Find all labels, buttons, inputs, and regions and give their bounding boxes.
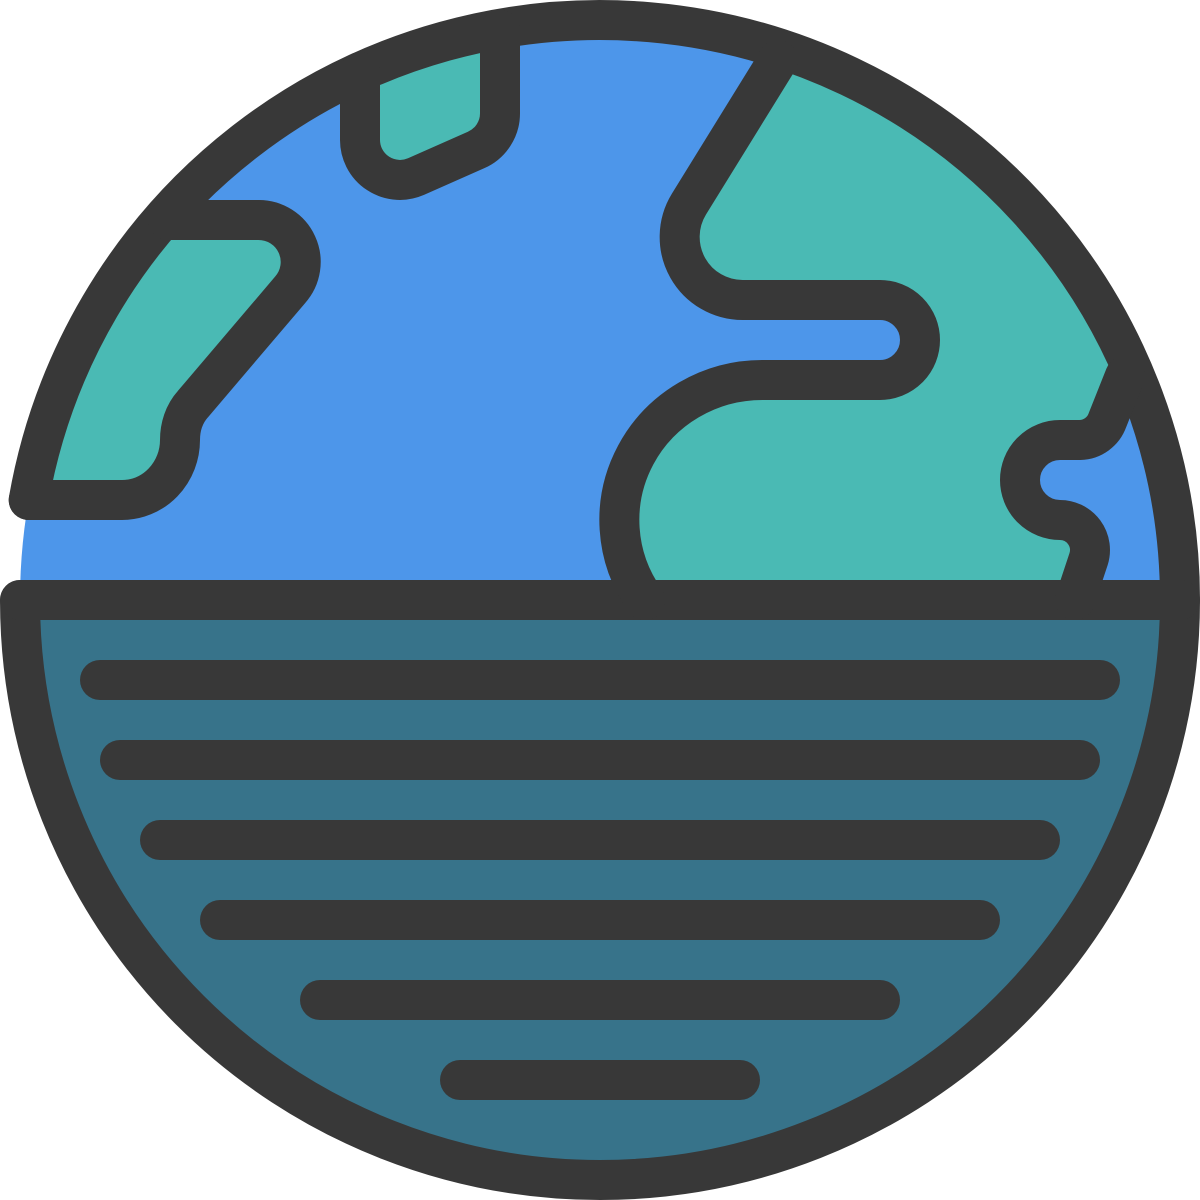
right landmass coast — [1020, 376, 1125, 600]
top island outline — [360, 30, 500, 180]
water lower half — [20, 600, 1180, 1180]
horizon line — [20, 580, 1180, 620]
water ripple lines — [100, 680, 1100, 1080]
continent: small top island — [360, 30, 500, 180]
globe upper sky ocean — [20, 20, 1180, 600]
upper left landmass outline — [29, 220, 301, 500]
right landmass outline — [619, 60, 920, 600]
continent: right large landmass — [619, 60, 1130, 600]
continent: upper left landmass — [29, 220, 301, 500]
